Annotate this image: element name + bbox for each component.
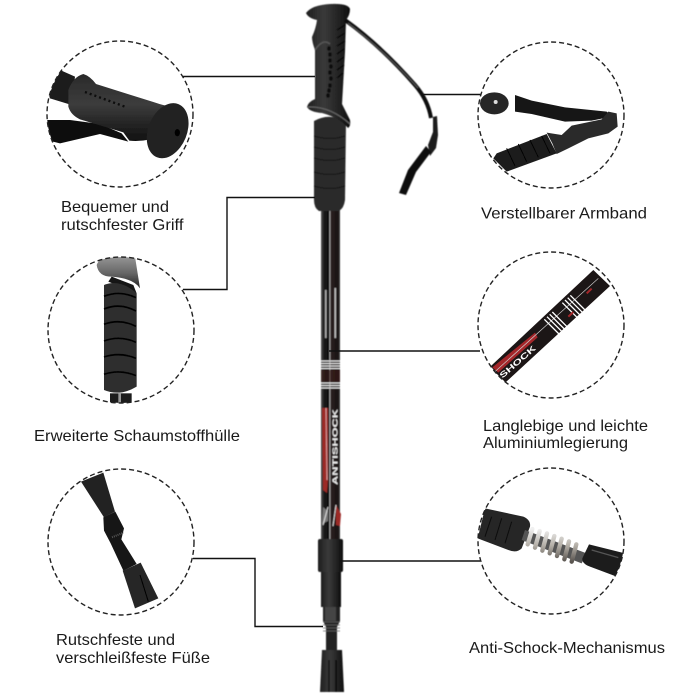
caption bbox=[56, 632, 210, 667]
caption: Anti-Schock-Mechanismus bbox=[469, 640, 665, 657]
strap close-up bbox=[480, 92, 618, 172]
foot close-up bbox=[81, 473, 158, 608]
panel: non-slip foot bbox=[48, 469, 210, 667]
connector: non-slip foot bbox=[193, 558, 323, 626]
connector: anti-shock bbox=[340, 560, 480, 562]
connector: foam sleeve bbox=[183, 198, 315, 290]
panel: aluminium alloy bbox=[478, 252, 648, 452]
grip close-up bbox=[47, 70, 189, 158]
panel: anti-shock mechanism bbox=[469, 468, 665, 657]
caption bbox=[483, 418, 648, 452]
panel: extended foam sleeve bbox=[34, 255, 240, 445]
pole shaft: ANTISHOCK bbox=[330, 408, 340, 485]
caption bbox=[61, 199, 184, 234]
connector: wrist strap bbox=[423, 94, 481, 96]
dashed circle bbox=[478, 468, 624, 614]
dashed circle bbox=[478, 252, 624, 398]
caption: rutschfester Griff bbox=[61, 217, 184, 234]
connector: grip bbox=[183, 76, 315, 78]
caption: Verstellbarer Armband bbox=[481, 206, 647, 222]
shaft close-up: SHOCK bbox=[498, 344, 538, 380]
caption: verschleißfeste Füße bbox=[56, 650, 210, 667]
caption: Bequemer und bbox=[61, 199, 169, 216]
trekking pole bbox=[306, 4, 438, 692]
panel: adjustable wrist strap bbox=[478, 42, 647, 222]
pole shaft bbox=[321, 208, 341, 542]
dashed circle bbox=[47, 41, 193, 187]
rubber tip bbox=[320, 650, 344, 692]
caption: Langlebige und leichte bbox=[483, 418, 648, 435]
caption: Erweiterte Schaumstoffhülle bbox=[34, 428, 240, 445]
wrist strap bbox=[345, 20, 438, 195]
caption: Rutschfeste und bbox=[56, 632, 175, 649]
spring close-up bbox=[478, 508, 625, 577]
handle grip bbox=[306, 4, 350, 128]
dashed circle bbox=[478, 42, 624, 188]
shaft close-up bbox=[487, 270, 610, 386]
connector: aluminium alloy bbox=[329, 350, 480, 352]
dashed circle bbox=[48, 257, 194, 403]
foam sleeve bbox=[314, 117, 346, 211]
dashed circle bbox=[48, 469, 194, 615]
panel: comfortable grip bbox=[45, 41, 196, 234]
foam close-up bbox=[97, 255, 140, 405]
lower telescopic section bbox=[318, 539, 343, 650]
caption: Aluminiumlegierung bbox=[483, 435, 628, 452]
